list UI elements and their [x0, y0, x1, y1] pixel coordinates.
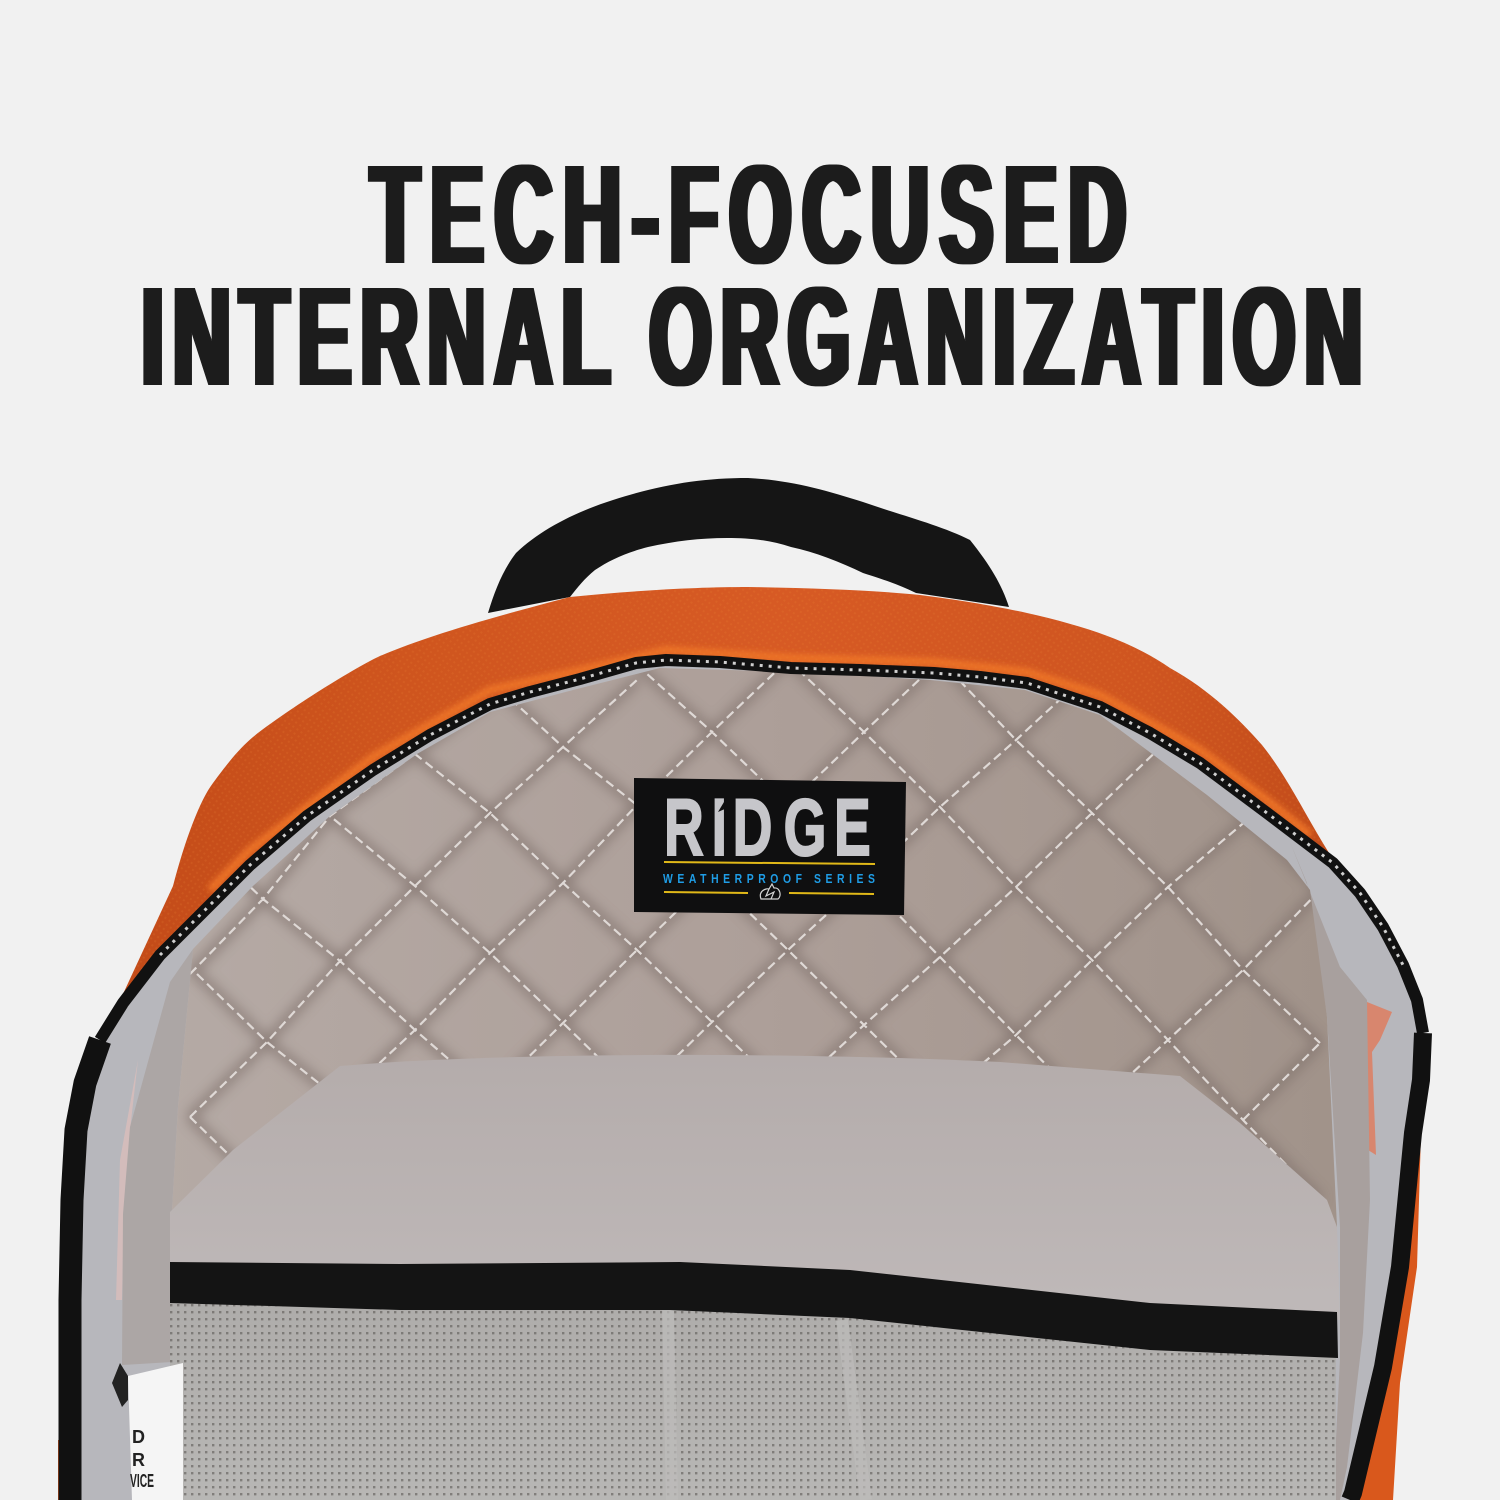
orange left strip: [58, 1440, 72, 1500]
care tag: D: [132, 1427, 145, 1447]
quilt puff shading: [184, 670, 1324, 1195]
lightning notch in the letter I: [718, 797, 727, 812]
brand label: [634, 778, 906, 915]
zipper left: [70, 1040, 100, 1500]
backpack photo illustration: [58, 478, 1423, 1500]
title: TECH-FOCUSED: [370, 136, 1126, 294]
right orange reflection: [1362, 1000, 1392, 1155]
quilt stitching: [189, 672, 1321, 1164]
orange right strip: [1345, 1100, 1422, 1500]
quilted back panel: [172, 668, 1337, 1227]
care tag: VICE: [130, 1471, 154, 1491]
brand name: RIDGE: [664, 781, 871, 873]
zipper right: [1350, 1033, 1423, 1500]
lower yellow lines: [664, 892, 874, 894]
orange weave texture: [95, 587, 1335, 1100]
left pink reflection: [116, 1060, 138, 1300]
title: INTERNAL ORGANIZATION: [142, 258, 1362, 416]
interior satin lining: [70, 660, 1423, 1500]
top handle: [488, 478, 1009, 613]
series name: WEATHERPROOF SERIES: [663, 872, 875, 886]
upper yellow line: [664, 862, 875, 864]
laptop pocket: [170, 1055, 1340, 1320]
mesh pocket: [170, 1295, 1336, 1500]
right webbing binding: [1290, 842, 1370, 1500]
care tag: R: [132, 1450, 145, 1470]
icon: storm cloud: [760, 884, 780, 899]
elastic band: [170, 1262, 1338, 1358]
care tag: [128, 1363, 183, 1500]
zipper top: [100, 660, 1423, 1040]
orange highlight beside zipper: [210, 650, 1310, 890]
left webbing binding: [122, 949, 193, 1365]
orange shell: [58, 587, 1422, 1500]
title: [142, 136, 1362, 416]
zipper pull: [112, 1363, 128, 1407]
mesh seams: [668, 1310, 866, 1500]
